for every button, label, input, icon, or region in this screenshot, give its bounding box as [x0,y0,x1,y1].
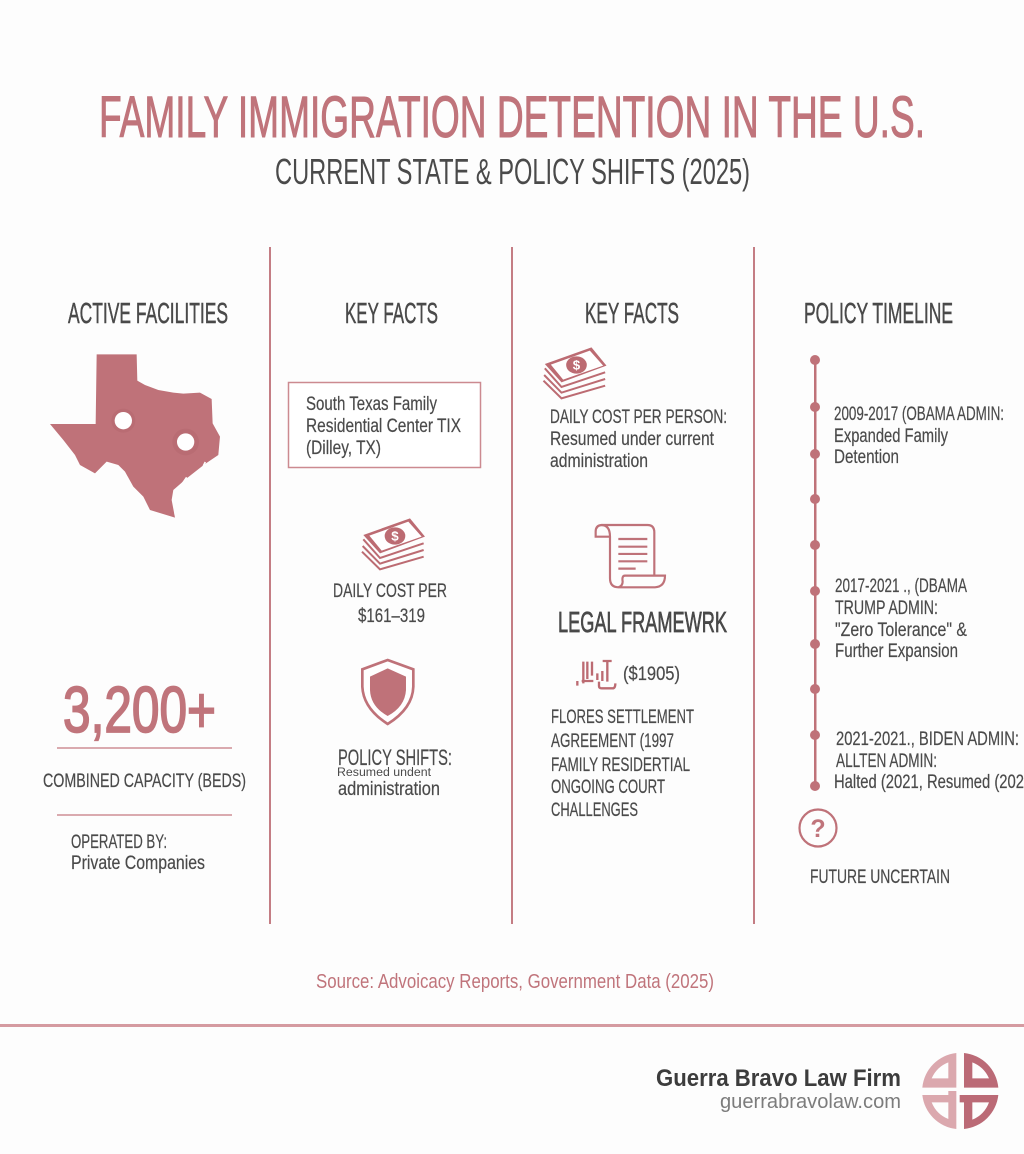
flores settlement text: FAMILY RESIDERTIAL [551,755,690,776]
future uncertain label: FUTURE UNCERTAIN [810,867,950,888]
operated by: OPERATED BY: [71,832,167,853]
timeline entry: Trump [835,576,967,662]
facility box [288,382,480,468]
panel: key facts 2 [543,298,727,821]
timeline entry: Trump: 2017-2021 ., (DBAMA [835,576,967,597]
timeline entry: Obama [834,404,1004,468]
icon: scroll document [596,525,665,587]
daily cost per person text: DAILY COST PER PERSON: [550,407,727,428]
facility box: Residential Center TIX [306,416,461,437]
timeline entry: Trump: Further Expansion [835,641,958,662]
flores settlement text [551,707,694,821]
icon: small legal glyph [577,661,615,688]
footer rule [0,1024,1024,1027]
daily cost text: DAILY COST PER [333,581,447,602]
icon: money stack [543,347,606,398]
column dividers [270,247,754,924]
heading: legal framework: LEGAL FRAMEWRK [558,607,727,639]
panel: active facilities [43,298,246,874]
icon: question mark: ? [810,815,826,843]
icon: money stack: $ [573,358,581,373]
heading: key facts: KEY FACTS [585,298,679,330]
heading: active facilities: ACTIVE FACILITIES [68,298,228,330]
capacity label: COMBINED CAPACITY (BEDS) [43,771,246,792]
daily cost per person text: administration [550,451,648,472]
timeline entry: Biden: ALLTEN ADMIN: [836,751,937,772]
timeline entry: Trump: "Zero Tolerance" & [835,620,967,641]
icon: money stack [362,518,425,569]
subtitle: CURRENT STATE & POLICY SHIFTS (2025) [275,151,750,192]
flores settlement text: AGREEMENT (1997 [551,731,674,752]
year label: ($1905) [623,664,680,685]
heading: key facts: KEY FACTS [345,298,438,330]
icon: money stack: $ [391,529,399,544]
timeline entry: Biden [834,729,1024,793]
timeline spine and dots [810,355,820,791]
daily cost text [333,581,447,627]
operated by [71,832,205,874]
timeline entry: Trump: TRUMP ADMIN: [835,598,938,619]
flores settlement text: ONGOING COURT [551,777,665,798]
source line: Source: Advoicacy Reports, Government Data (2025) [316,971,714,993]
policy shifts text: administration [338,779,440,800]
footer firm name: Guerra Bravo Law Firm [656,1065,901,1092]
policy shifts text: POLICY SHIFTS: [338,745,452,770]
operated by: Private Companies [71,853,205,874]
timeline entry: Obama: Expanded Family [834,426,948,447]
daily cost text: $161–319 [358,606,425,627]
flores settlement text: FLORES SETTLEMENT [551,707,694,728]
logo: knot emblem [922,1053,998,1129]
flores settlement text: CHALLENGES [551,800,638,821]
capacity top rule [57,747,232,749]
facility box: (Dilley, TX) [306,438,381,459]
big number: capacity: 3,200+ [63,673,216,746]
icon: Texas map with two facility markers [50,354,220,518]
policy shifts text: Resumed undent [337,767,432,779]
policy shifts text [337,745,452,800]
footer firm name [656,1065,901,1113]
facility box: South Texas Family [306,394,437,415]
capacity bottom rule [57,814,232,816]
daily cost per person text [550,407,727,472]
panel: policy timeline [800,298,1024,888]
timeline entry: Obama: Detention [834,447,899,468]
icon: shield [362,660,413,724]
daily cost per person text: Resumed under current [550,429,715,450]
footer firm name: guerrabravolaw.com [720,1091,901,1113]
icon: question mark [800,810,836,846]
panel: key facts 1 [288,298,480,800]
